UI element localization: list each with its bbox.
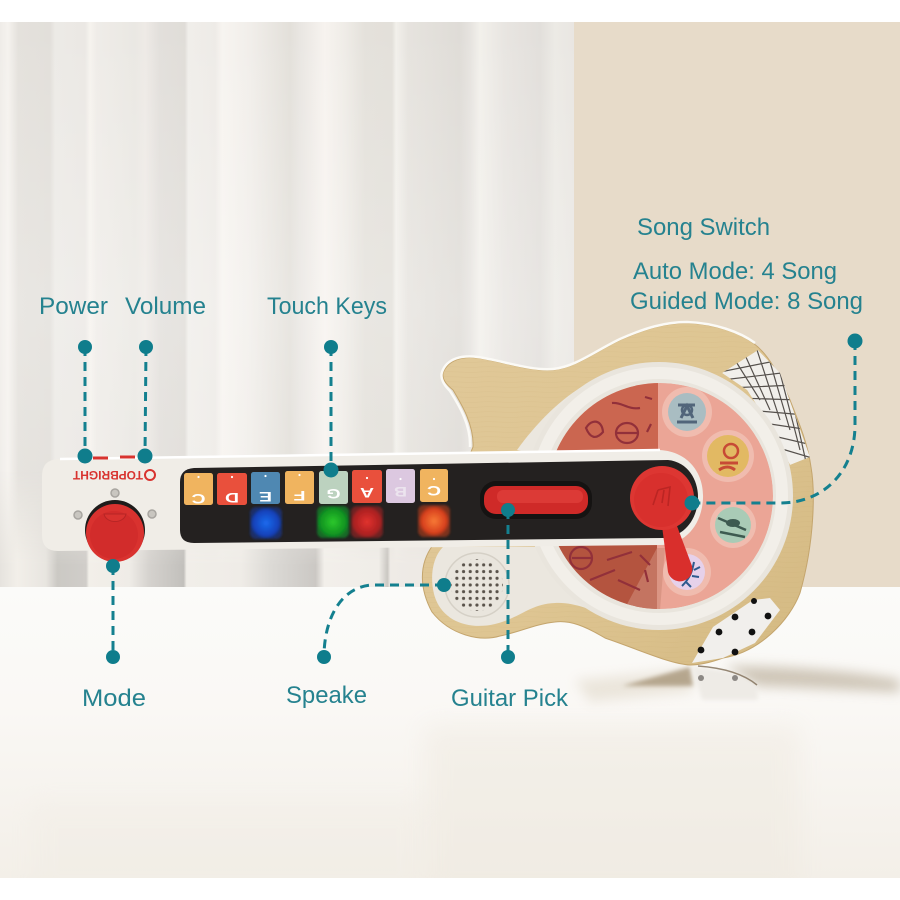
callout: speaker: [286, 578, 451, 709]
callout: volume: [125, 293, 206, 464]
callout: song switch leader: [684, 334, 862, 510]
white ring: [517, 362, 793, 630]
callout: power: Power: [39, 293, 108, 320]
touch keys: G: [326, 486, 340, 502]
callout: song switch text: [630, 214, 863, 315]
touch keys: [184, 469, 448, 507]
callout: power: [39, 293, 108, 464]
song disc 4: harp: [663, 548, 711, 596]
touch keys: F: [293, 488, 306, 504]
callout: volume: Volume: [125, 293, 206, 320]
brand logo upside down: TOPBRIGHT: [73, 468, 143, 480]
touch keys: E: [259, 489, 272, 505]
touch keys: D: [225, 490, 239, 506]
song disc 3: violin: [710, 502, 756, 548]
song window: [556, 383, 773, 609]
touch keys: C: [192, 491, 206, 507]
black control panel: [180, 460, 698, 543]
callout: touch keys: Touch Keys: [267, 293, 387, 320]
song switch knob: [630, 466, 694, 581]
callout: speaker: Speake: [286, 682, 367, 709]
checker fabric patch: [720, 350, 812, 465]
indicator screws: [74, 489, 156, 519]
callout: song switch text: Guided Mode: 8 Song: [630, 288, 863, 315]
callout: song switch text: Auto Mode: 4 Song: [633, 258, 837, 285]
white top rim: [441, 322, 755, 447]
guitar toy: [42, 322, 813, 665]
brand logo mark: [145, 470, 155, 480]
polka dot fabric patch: [692, 598, 780, 663]
wood grain: [422, 323, 813, 665]
mode button: [85, 500, 145, 562]
window sketches: [570, 397, 652, 590]
callout: mode: Mode: [82, 685, 146, 712]
key lights: [250, 505, 450, 539]
callout: mode: [82, 559, 146, 712]
song disc 1: drum kit: [662, 387, 712, 437]
power and volume red marks: [93, 457, 135, 458]
song disc 2: horn: [702, 430, 754, 482]
touch keys: B: [394, 484, 407, 500]
callout: touch keys: [267, 293, 387, 478]
callout: guitar pick: Guitar Pick: [451, 685, 569, 712]
white lower plate: [432, 547, 620, 626]
touch keys: C: [427, 483, 441, 499]
touch keys: A: [360, 485, 374, 501]
neck highlight: [60, 450, 660, 459]
guitar pick slider: [480, 481, 592, 519]
speaker grille: [445, 553, 509, 617]
guitar wood body: [422, 323, 813, 665]
callout: guitar pick: [451, 503, 569, 712]
callout: song switch text: Song Switch: [637, 214, 770, 241]
neck white frame: [42, 450, 703, 551]
